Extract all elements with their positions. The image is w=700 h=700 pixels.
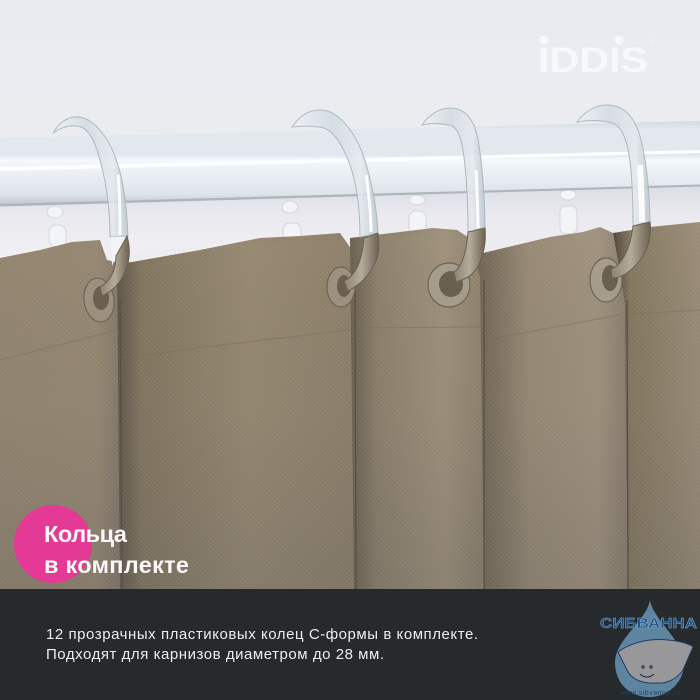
watermark logo: Сибванна <box>600 600 698 697</box>
curtain panel second <box>117 233 356 589</box>
badge heading: Кольца <box>44 521 128 547</box>
wall background <box>0 0 700 260</box>
brand logo: IDDIS: ® <box>649 38 655 46</box>
eyelet 4 <box>590 258 622 302</box>
curtain panel right <box>613 222 700 589</box>
ring 3 <box>422 108 485 282</box>
eyelet 3 <box>428 263 470 307</box>
curtain panel left <box>0 240 122 589</box>
logo url: www.sibvanna.ru <box>619 690 680 697</box>
eyelet 1 <box>81 276 117 324</box>
eyelet 2 <box>327 267 355 307</box>
rod lower edge <box>0 184 700 206</box>
logo bathtub <box>618 640 693 683</box>
rear ring pegs <box>47 190 577 247</box>
description text: Подходят для карнизов диаметром до 28 мм. <box>46 646 384 663</box>
logo water drop <box>615 600 684 697</box>
brand logo: IDDIS <box>538 36 655 80</box>
pink circle badge <box>14 505 92 583</box>
curtain weave <box>117 231 630 589</box>
curtain panel fourth <box>476 227 628 589</box>
fold lines <box>120 280 628 589</box>
ring 1 <box>53 117 129 296</box>
rod highlight <box>0 150 700 171</box>
wall below rod <box>0 185 700 270</box>
ring 2 <box>292 110 379 291</box>
curtain rod <box>0 121 700 206</box>
stitching <box>0 310 700 360</box>
description text <box>46 626 478 663</box>
badge heading <box>44 521 189 578</box>
brand logo: IDDIS: IDDIS <box>538 41 648 80</box>
logo wordmark: СИБВАННА <box>600 616 698 632</box>
curtain panel third <box>350 228 484 589</box>
curtain shading <box>0 421 700 589</box>
badge heading: в комплекте <box>44 552 189 578</box>
description text: 12 прозрачных пластиковых колец С-формы в комплекте. <box>46 626 478 643</box>
dark footer panel <box>0 589 700 700</box>
ring 4 <box>577 105 650 278</box>
logo face <box>640 666 654 677</box>
curtain <box>0 220 700 589</box>
